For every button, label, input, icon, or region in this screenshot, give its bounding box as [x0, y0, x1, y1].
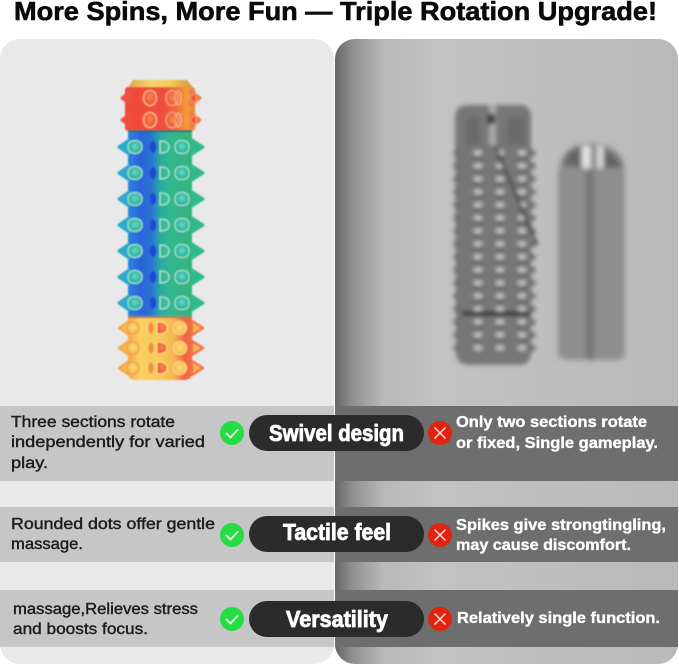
left description: massage. [11, 536, 83, 553]
left row band [0, 507, 334, 562]
panel: our product [0, 39, 334, 664]
right description [456, 414, 658, 452]
blurred competitor toy: smooth cylinder [558, 143, 625, 360]
left description: Rounded dots offer gentle [11, 516, 215, 533]
left row band [0, 406, 334, 481]
right description: may cause discomfort. [456, 537, 631, 554]
left description: independently for varied [11, 434, 205, 451]
left description [13, 601, 198, 638]
pill: tactile feel [249, 516, 424, 552]
left description [11, 516, 215, 553]
icon: green check [220, 421, 244, 445]
left description: Three sections rotate [11, 414, 175, 431]
panel: other product [335, 39, 678, 664]
icon: red cross [428, 607, 452, 631]
toy red section [122, 87, 200, 131]
icon: red cross [428, 421, 452, 445]
blurred competitor toy: spiked cylinder [452, 105, 537, 365]
left description: play. [11, 455, 48, 472]
right description: Spikes give strongtingling, [456, 517, 666, 534]
left description [11, 414, 205, 472]
pill: swivel design: Swivel design [269, 420, 404, 446]
left row band [0, 590, 334, 647]
icon: green check [220, 607, 244, 631]
toy blue-green section [119, 130, 203, 317]
right description: Relatively single function. [457, 610, 660, 627]
right row band [335, 507, 678, 562]
toy top cap [128, 80, 193, 88]
comparison row 2: tactile feel [0, 507, 678, 562]
pill: tactile feel: Tactile feel [283, 519, 391, 545]
icon: red cross [428, 523, 452, 547]
right row band [335, 590, 678, 647]
left description: and boosts focus. [13, 621, 148, 638]
pill: versatility [249, 601, 424, 637]
right row band [335, 406, 678, 481]
right description: or fixed, Single gameplay. [456, 435, 658, 452]
left description: massage,Relieves stress [13, 601, 198, 618]
right description: Only two sections rotate [456, 414, 647, 431]
comparison row 3: versatility [0, 590, 678, 647]
pill: versatility: Versatility [286, 606, 388, 632]
toy yellow-orange section [119, 316, 203, 380]
right description [456, 517, 666, 554]
toy: three-section rainbow fidget [119, 80, 203, 380]
pill: swivel design [249, 415, 424, 451]
comparison row 1: swivel design [0, 406, 678, 481]
icon: green check [220, 523, 244, 547]
